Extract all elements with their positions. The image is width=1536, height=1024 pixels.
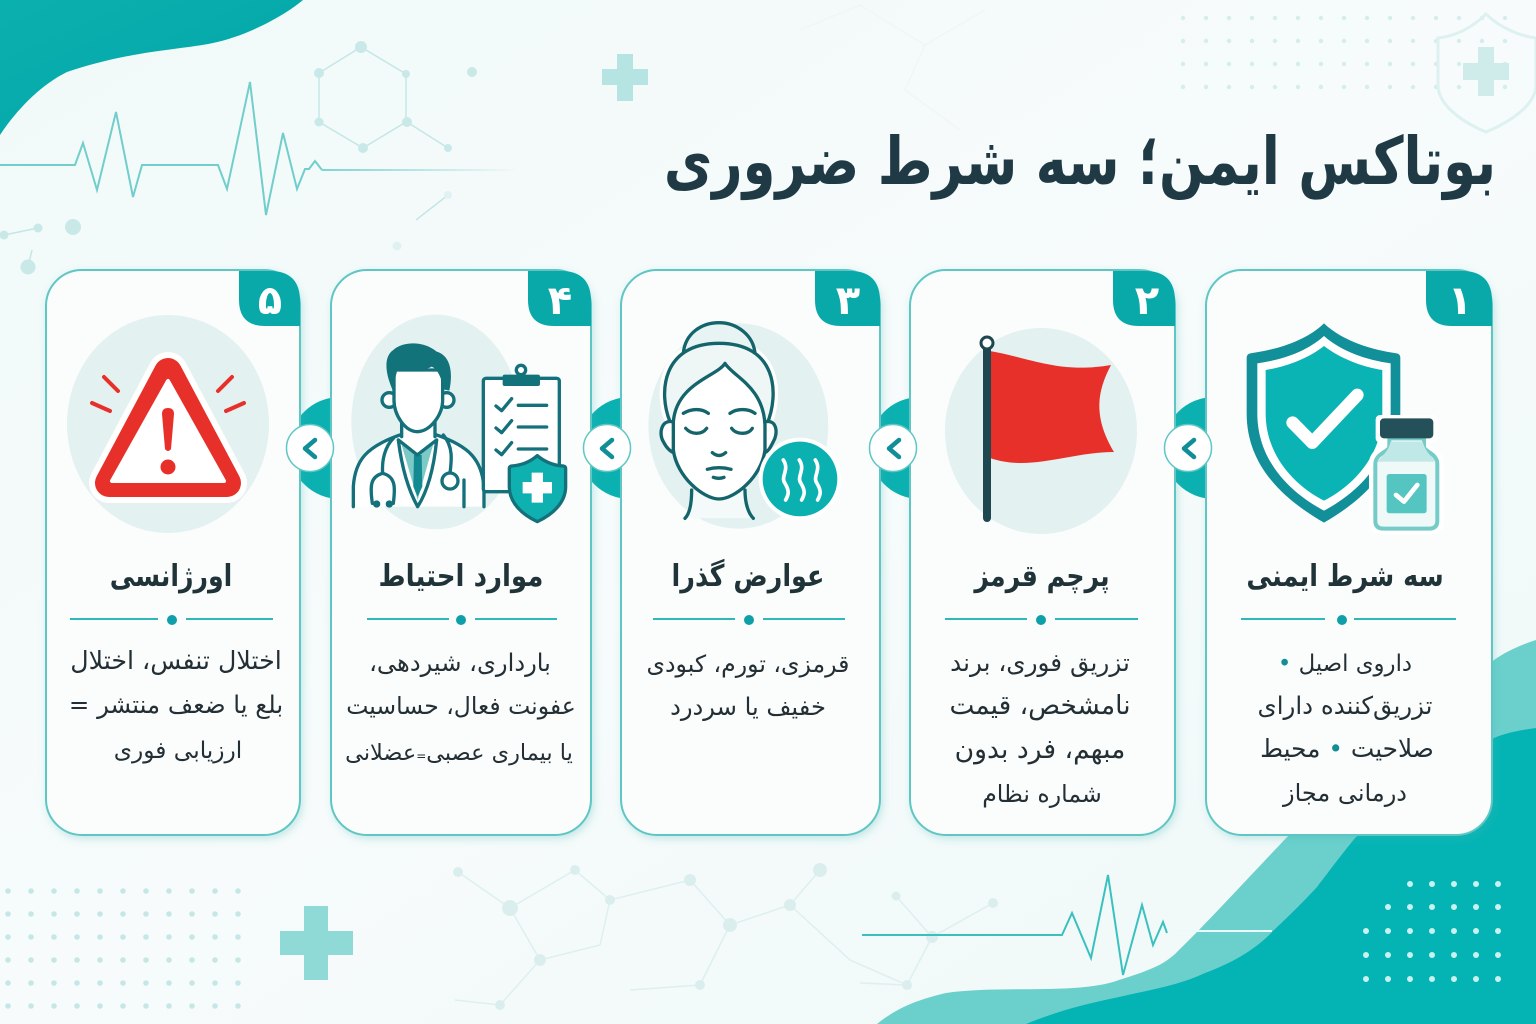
card heading: موارد احتیاط xyxy=(379,558,543,593)
arrow: card 2 to 3 xyxy=(870,424,916,472)
molecule: bottom network xyxy=(453,863,998,1010)
molecule: top faint hexagon xyxy=(800,5,985,130)
body text: بارداری، شیردهی، xyxy=(369,649,551,677)
divider xyxy=(70,615,273,625)
body text: عفونت فعال، حساسیت xyxy=(346,692,576,720)
badge 5: ۵ xyxy=(258,278,282,324)
plus: top center xyxy=(602,54,648,101)
badge 3: ۳ xyxy=(836,278,860,324)
body text: درمانی مجاز xyxy=(1282,779,1407,807)
icon: shield with vial xyxy=(1247,323,1439,530)
decorative wave: bottom right light xyxy=(877,640,1536,1024)
arrow: card 3 to 4 xyxy=(584,424,630,472)
card heading: اورژانسی xyxy=(110,558,232,594)
body text: نامشخص، قیمت xyxy=(949,690,1131,721)
badge 4: ۴ xyxy=(548,278,572,324)
badge 3 xyxy=(815,271,880,326)
icon: red flag xyxy=(945,328,1137,534)
ecg line: bottom xyxy=(862,875,1272,975)
icon: faded shield top right xyxy=(1438,14,1536,132)
dots: bottom left xyxy=(5,888,255,1013)
decorative wave: top left xyxy=(0,0,303,135)
body text xyxy=(69,646,283,764)
title: بوتاکس ایمن؛ سه شرط ضروری xyxy=(664,124,1496,201)
panel: card 4 precautions xyxy=(331,270,591,835)
body text: شماره نظام xyxy=(982,780,1102,808)
badge 4 xyxy=(528,271,591,326)
icon: warning triangle xyxy=(67,315,269,533)
body text: بلع یا ضعف منتشر = xyxy=(69,690,283,719)
body text xyxy=(345,649,576,766)
body text: تزریق‌کننده دارای xyxy=(1258,691,1432,720)
arrow: card 4 to 5 xyxy=(286,424,334,472)
icon: doctor with clipboard xyxy=(351,315,566,529)
divider xyxy=(945,615,1138,625)
dots: top right xyxy=(1180,15,1510,95)
body text: اختلال تنفس، اختلال xyxy=(70,646,282,675)
card heading: عوارض گذرا xyxy=(672,558,824,594)
badge 2 xyxy=(1113,271,1175,326)
body text: قرمزی، تورم، کبودی xyxy=(647,650,849,678)
arrow: card 1 to 2 xyxy=(1164,424,1212,472)
badge 1: ۱ xyxy=(1448,278,1472,324)
panel: card 1 safety conditions xyxy=(1206,270,1492,835)
body text: تزریق فوری، برند xyxy=(950,648,1130,677)
connector tabs xyxy=(289,397,1265,499)
body text xyxy=(647,650,849,721)
body text: داروی اصیل • xyxy=(1278,651,1412,677)
ecg line: top left xyxy=(0,82,520,215)
body text xyxy=(949,648,1131,808)
divider xyxy=(367,615,557,625)
body text: خفیف یا سردرد xyxy=(670,693,826,721)
badge 5 xyxy=(239,271,300,326)
panel: card 3 transient side effects xyxy=(621,270,880,835)
badge 1 xyxy=(1426,271,1492,326)
badge 2: ۲ xyxy=(1135,278,1159,324)
panel: card 2 red flag xyxy=(910,270,1175,835)
body text xyxy=(1258,651,1434,807)
divider xyxy=(1241,615,1456,625)
dots: bottom right xyxy=(1363,881,1501,982)
divider xyxy=(653,615,845,625)
molecule: top left hexagon xyxy=(0,41,477,274)
body text: ارزیابی فوری xyxy=(114,737,242,764)
card heading: سه شرط ایمنی xyxy=(1246,558,1444,594)
plus: bottom left xyxy=(280,906,353,980)
card heading: پرچم قرمز xyxy=(973,558,1110,594)
body text: مبهم، فرد بدون xyxy=(955,734,1125,765)
panel: card 5 emergency xyxy=(46,270,300,835)
body text: صلاحیت • محیط xyxy=(1260,734,1434,763)
body text: یا بیماری عصبی=عضلانی xyxy=(345,740,573,766)
icon: face with wave badge xyxy=(648,323,841,529)
decorative wave: bottom right dark xyxy=(1026,728,1536,1024)
